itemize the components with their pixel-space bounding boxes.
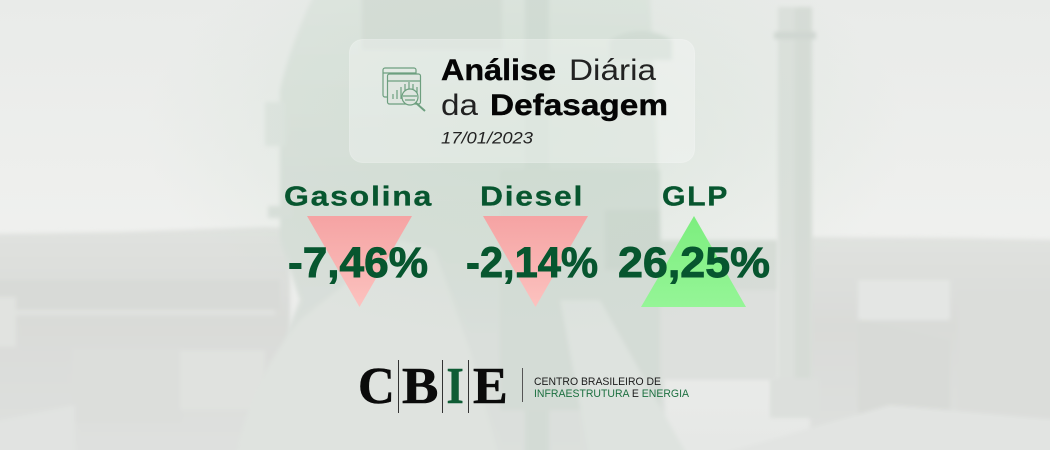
background: hills and industrial landscape — [0, 227, 1050, 450]
logo tagline — [534, 376, 690, 400]
value: GLP: 26,25% — [618, 239, 770, 287]
background: refinery tower — [235, 0, 778, 450]
heading: first line: Diária — [569, 54, 657, 87]
panel: title card — [350, 40, 694, 162]
logo letters: C — [358, 358, 395, 415]
logo tagline: INFRAESTRUTURA E ENERGIA — [534, 388, 690, 400]
panel: Gasolina — [284, 180, 433, 307]
logo letters: B — [402, 356, 438, 415]
heading: first line — [441, 54, 657, 87]
label: Gasolina: Gasolina — [284, 180, 433, 212]
heading: second line — [441, 89, 668, 122]
value: Gasolina: -7,46% — [288, 239, 428, 287]
up arrow: GLP — [641, 216, 746, 307]
icon: analytics windows with magnifier — [383, 68, 425, 111]
heading: second line: da — [441, 89, 479, 122]
heading: second line: Defasagem — [490, 89, 668, 122]
panel: GLP — [618, 180, 770, 307]
value: Diesel: -2,14% — [466, 239, 598, 287]
logo: CBIE — [358, 356, 690, 415]
logo letters — [358, 356, 508, 415]
heading: first line: Análise — [441, 54, 556, 87]
logo letters: E — [473, 358, 508, 415]
date: 17/01/2023 — [441, 128, 534, 148]
background: green glow — [145, 0, 905, 340]
label: GLP: GLP — [662, 180, 729, 212]
logo tagline: CENTRO BRASILEIRO DE — [534, 376, 661, 388]
background: chimney — [770, 7, 820, 418]
logo letters: I — [446, 358, 464, 415]
down arrow: Diesel — [483, 216, 588, 307]
panel: Diesel — [466, 180, 598, 307]
down arrow: Gasolina — [307, 216, 412, 307]
label: Diesel: Diesel — [480, 180, 584, 212]
